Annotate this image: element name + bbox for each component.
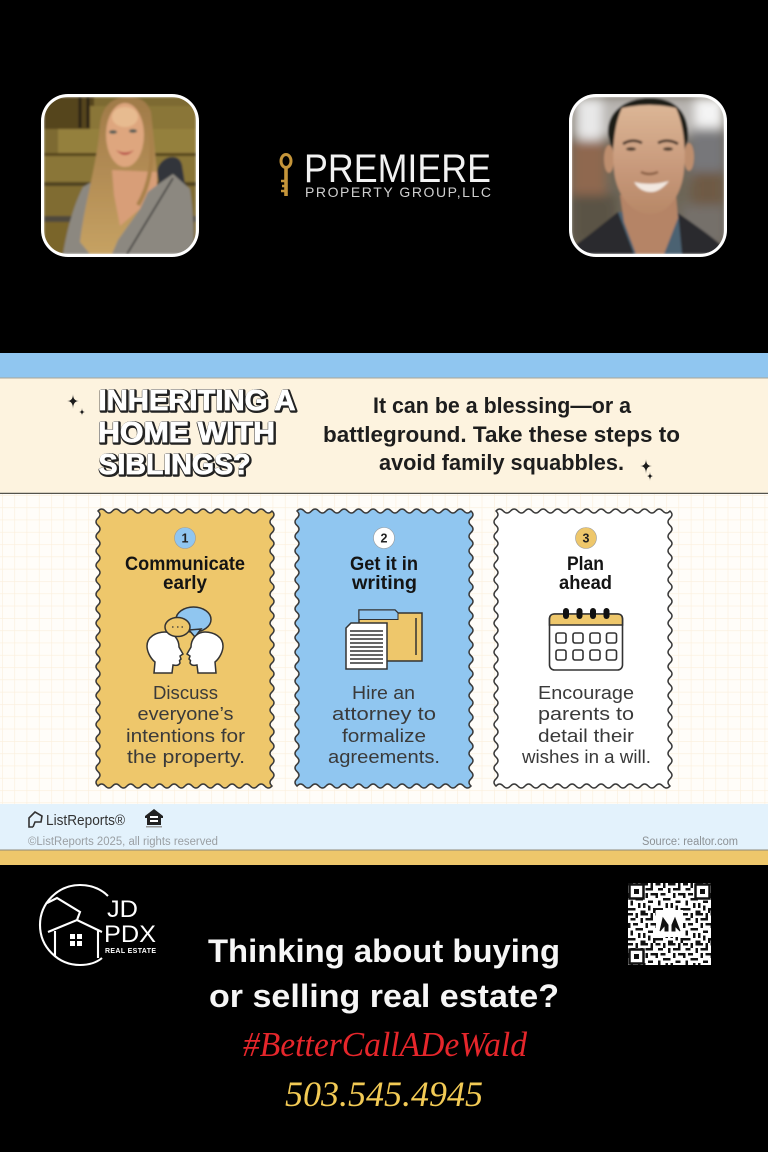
number badge 1 (174, 528, 196, 548)
panel: header band (0, 378, 768, 493)
body text: Hire an (352, 683, 415, 703)
copyright: ©ListReports 2025, all rights reserved (28, 836, 218, 848)
body text: wishes in a will. (521, 747, 651, 767)
photo: woman agent (41, 94, 199, 257)
heading (125, 554, 245, 594)
number badge 3: 3 (583, 532, 590, 546)
title: Inheriting a home with siblings: HOME WITH (98, 417, 275, 449)
icon: house in circle (40, 885, 108, 965)
heading: early (163, 573, 207, 594)
heading: Plan (567, 554, 604, 575)
body text (126, 683, 245, 767)
icon: calendar (550, 608, 622, 670)
card 2: get it in writing (295, 509, 473, 788)
body text: agreements. (328, 747, 440, 767)
hashtag: #BetterCallADeWald (243, 1025, 527, 1064)
body text: everyone’s (138, 704, 234, 724)
subtitle: avoid family squabbles. (379, 450, 624, 475)
brand subtitle: PROPERTY GROUP,LLC (305, 184, 491, 200)
icon: ListReports logo (29, 812, 42, 827)
number badge 2: 2 (381, 532, 388, 546)
gold band (0, 850, 768, 865)
body text: the property. (127, 747, 245, 767)
number badge 1: 1 (182, 532, 189, 546)
title: Inheriting a home with siblings (98, 385, 297, 482)
icon: gold key (281, 154, 291, 196)
heading: writing (351, 573, 417, 594)
PDX: PDX (104, 921, 156, 948)
title: Inheriting a home with siblings: SIBLINGS? (98, 449, 250, 481)
heading: ahead (559, 573, 612, 594)
body text: Encourage (538, 683, 634, 703)
REAL ESTATE: REAL ESTATE (105, 948, 156, 955)
photo: man agent (569, 94, 727, 257)
body text (328, 683, 440, 767)
phone number: 503.545.4945 (285, 1074, 483, 1114)
subtitle: battleground. Take these steps to (323, 422, 680, 447)
title: Inheriting a home with siblings: SIBLINGS? (100, 450, 252, 482)
number badge 3 (576, 528, 596, 548)
number badge 2 (374, 528, 394, 548)
card 3: plan ahead (494, 509, 672, 788)
icon: sparkles right (640, 459, 653, 481)
ListReports name: ListReports® (46, 813, 125, 829)
body text (521, 683, 651, 767)
panel: footer band (0, 804, 768, 850)
icon: sparkles left (67, 394, 85, 416)
body text: detail their (538, 726, 634, 746)
grid background (0, 494, 768, 804)
logo: Premiere Property Group (281, 147, 491, 200)
JD: JD (107, 896, 138, 923)
call to action heading (208, 933, 560, 1014)
body text: attorney to (332, 704, 436, 724)
title: Inheriting a home with siblings: HOME WITH (99, 418, 276, 450)
call to action heading: or selling real estate? (209, 978, 559, 1014)
call to action heading: Thinking about buying (208, 933, 560, 969)
title: Inheriting a home with siblings: INHERITING A (100, 386, 297, 418)
QR code (628, 883, 711, 965)
heading (559, 554, 612, 594)
body text: Discuss (153, 683, 218, 703)
logo: JD PDX Real Estate (40, 885, 156, 965)
heading: Communicate (125, 554, 245, 575)
icon: two heads talking (147, 607, 223, 673)
body text: formalize (342, 726, 426, 746)
brand name: PREMIERE (304, 147, 491, 191)
subtitle: It can be a blessing—or a (373, 393, 632, 418)
title: Inheriting a home with siblings: INHERITING A (98, 385, 296, 417)
heading: Get it in (350, 554, 418, 575)
body text: parents to (538, 704, 634, 724)
top blue band (0, 353, 768, 378)
icon: equal housing opportunity (145, 809, 163, 828)
card 1: communicate early (96, 509, 274, 788)
subtitle (323, 393, 680, 475)
icon: twin arrows (660, 918, 680, 931)
source: Source: realtor.com (642, 836, 738, 848)
heading (350, 554, 418, 594)
body text: intentions for (126, 726, 245, 746)
icon: document and folder (346, 610, 422, 669)
